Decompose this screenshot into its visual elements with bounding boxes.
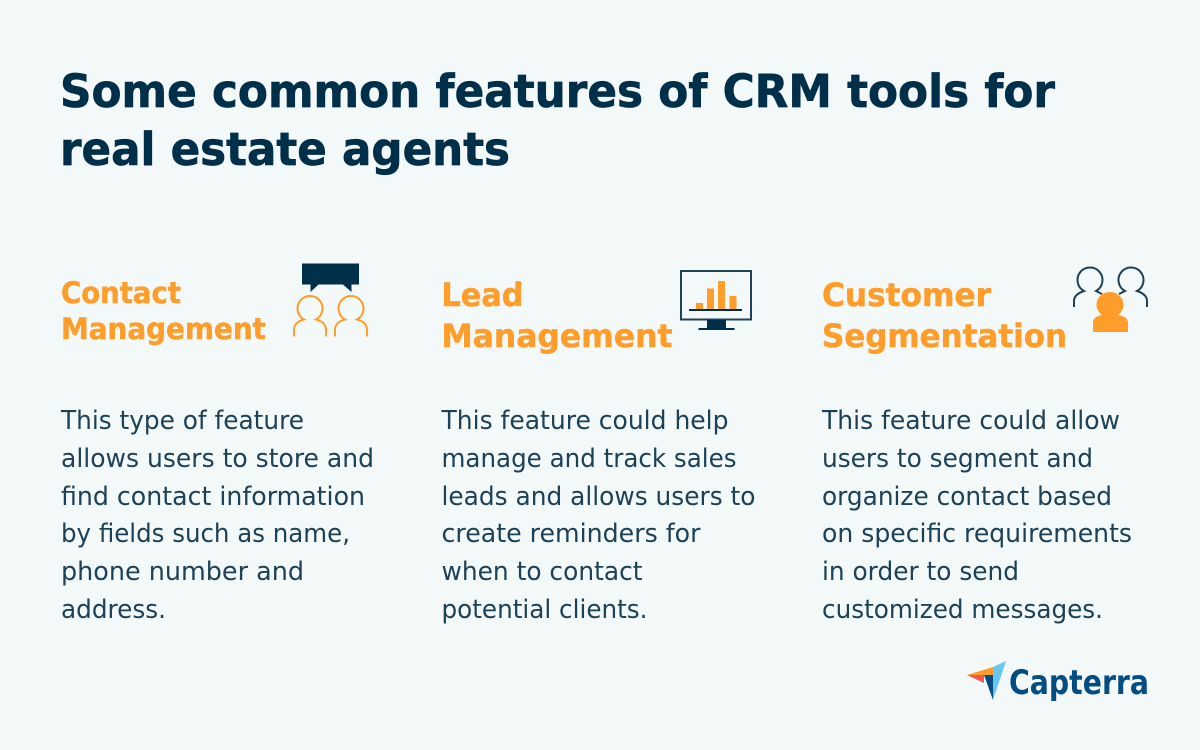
heading: customer segmentation [822,276,1067,355]
text: customer segmentation description: This feature could allow [821,406,1120,436]
heading: lead management: Lead [442,276,524,314]
heading: contact management: Management [61,312,266,346]
heading: lead management [442,276,672,355]
heading: customer segmentation: Segmentation [822,317,1067,355]
text: customer segmentation description [821,406,1132,625]
icon: group of people with highlighted person [1074,268,1147,332]
text: contact management description: allows users to store and [61,444,374,474]
text: lead management description: leads and allows users to [442,482,756,512]
heading: contact management: Contact [61,276,181,310]
logo: Capterra: Capterra [1009,663,1149,703]
text: lead management description: when to contact [442,557,642,587]
text: customer segmentation description: in order to send [822,557,1019,587]
text: contact management description: This type of feature [60,406,304,436]
heading: lead management: Management [442,317,672,355]
text: contact management description: find contact information [61,482,365,512]
title: real estate agents [60,123,510,176]
text: contact management description: by fields such as name, [61,519,350,549]
text: customer segmentation description: organize contact based [822,482,1112,512]
text: lead management description: potential clients. [442,595,648,625]
text: contact management description: phone number and [61,557,304,587]
text: lead management description [441,406,756,625]
text: lead management description: manage and track sales [442,444,736,474]
panel: contact management [60,264,374,625]
panel: customer segmentation [821,268,1147,625]
text: contact management description: address. [61,595,166,625]
logo: Capterra [967,661,1149,703]
heading: customer segmentation: Customer [822,276,991,314]
icon: two people with speech bubble [294,264,367,336]
text: lead management description: create reminders for [442,519,701,549]
icon: monitor with bar chart [681,271,751,330]
text: lead management description: This feature could help [441,406,728,436]
panel: lead management [441,271,756,625]
text: customer segmentation description: on specific requirements [822,519,1132,549]
text: contact management description [60,406,374,625]
title [60,65,1056,176]
text: customer segmentation description: customized messages. [822,595,1103,625]
text: customer segmentation description: users to segment and [822,444,1093,474]
heading: contact management [61,276,266,346]
title: Some common features of CRM tools for [60,65,1056,118]
